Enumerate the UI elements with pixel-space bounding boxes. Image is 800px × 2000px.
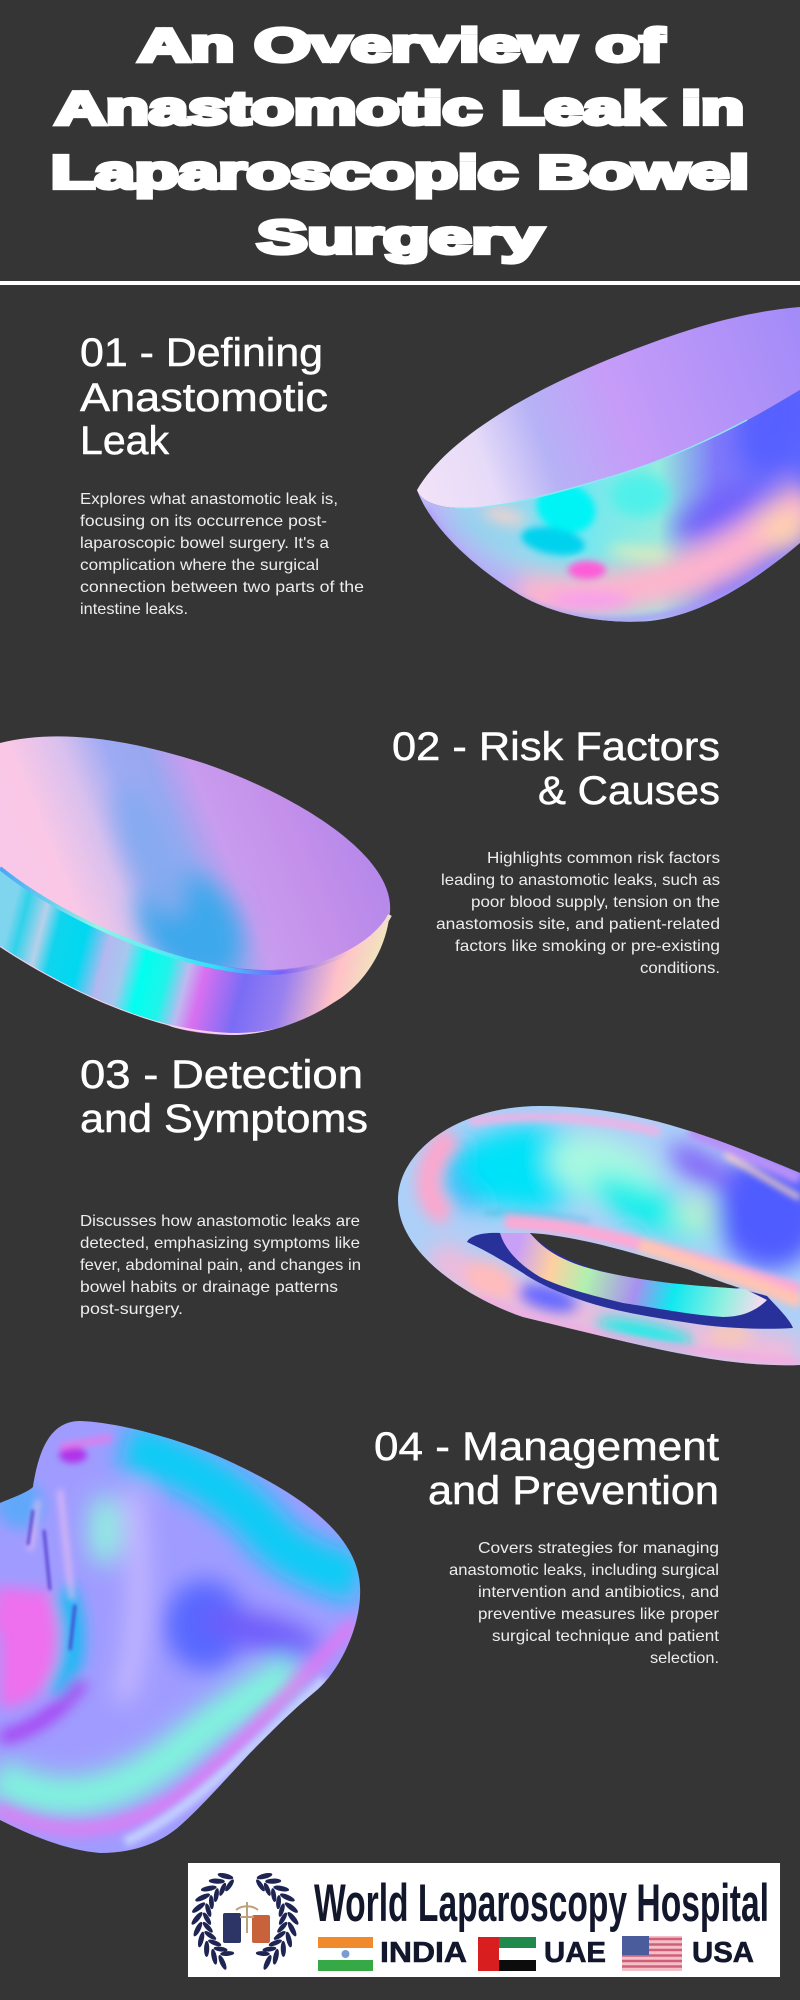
text block: 01: Explores what anastomotic leak is, [80, 491, 338, 508]
text block: 01: connection between two parts of the [80, 579, 364, 596]
title: Anastomotic Leak in [55, 82, 744, 134]
text block: 04: selection. [650, 1650, 719, 1667]
icon: iridescent bowl [410, 307, 800, 630]
heading: 01: Leak [80, 419, 170, 463]
torus inner shadow [467, 1233, 793, 1329]
text block: 02: leading to anastomotic leaks, such as [441, 872, 720, 889]
text block: 01: focusing on its occurrence post- [80, 513, 327, 530]
title [51, 19, 749, 263]
heading: 02: & Causes [538, 769, 720, 813]
text block: 02: poor blood supply, tension on the [471, 894, 720, 911]
heading: 04: and Prevention [428, 1469, 719, 1513]
heading: 01 [80, 331, 328, 463]
flag: USA [622, 1936, 682, 1971]
text block: 03: fever, abdominal pain, and changes in [80, 1257, 361, 1274]
text block: 04: anastomotic leaks, including surgical [449, 1562, 719, 1579]
heading: 03: 03 - Detection [80, 1053, 363, 1097]
label: UAE: UAE [544, 1937, 606, 1969]
torus inner wall [500, 1233, 767, 1317]
panel: 01 defining anastomotic leak [80, 307, 800, 630]
logo: World Laparoscopy Hospital [188, 1863, 780, 1977]
text block: 02 [436, 850, 720, 977]
text block: 04: preventive measures like proper [478, 1606, 720, 1623]
heading: 01: Anastomotic [80, 376, 328, 420]
text block: 02: anastomosis site, and patient-related [436, 916, 720, 933]
panel: 02 risk factors and causes [0, 725, 720, 1045]
heading: 03 [80, 1053, 368, 1141]
icon: iridescent torus [390, 1100, 800, 1370]
label: USA: USA [692, 1937, 754, 1969]
title: Surgery [257, 211, 544, 263]
panel: 03 detection and symptoms [80, 1053, 800, 1370]
flag: India [318, 1937, 373, 1971]
heading: 01: 01 - Defining [80, 331, 323, 375]
text block: 03: bowel habits or drainage patterns [80, 1279, 338, 1296]
heading: 04 [374, 1425, 719, 1513]
text block: 04: Covers strategies for managing [478, 1540, 719, 1557]
text block: 03: post-surgery. [80, 1301, 183, 1318]
text block: 02: factors like smoking or pre-existing [455, 938, 720, 955]
text block: 04: intervention and antibiotics, and [478, 1584, 719, 1601]
text block: 03: detected, emphasizing symptoms like [80, 1235, 360, 1252]
torus hole [530, 1233, 740, 1288]
title: Laparoscopic Bowel [51, 146, 749, 198]
text block: 04 [449, 1540, 720, 1667]
text block: 01 [80, 491, 364, 618]
text block: 02: Highlights common risk factors [487, 850, 720, 867]
icon: iridescent disc [0, 736, 395, 1045]
text block: 03 [80, 1213, 361, 1318]
icon: iridescent blob [0, 1410, 370, 1860]
icon: laurel wreath emblem [190, 1867, 300, 1972]
text block: 01: complication where the surgical [80, 557, 319, 574]
text block: 01: intestine leaks. [80, 601, 188, 618]
text block: 04: surgical technique and patient [492, 1628, 720, 1645]
label: INDIA: INDIA [380, 1937, 467, 1969]
text block: 01: laparoscopic bowel surgery. It's a [80, 535, 329, 552]
text block: 03: Discusses how anastomotic leaks are [80, 1213, 360, 1230]
heading: 02: 02 - Risk Factors [392, 725, 720, 769]
heading: 04: 04 - Management [374, 1425, 719, 1469]
flag: UAE [478, 1937, 536, 1971]
text block: 02: conditions. [640, 960, 720, 977]
panel: 04 management and prevention [0, 1410, 720, 1860]
heading: 03: and Symptoms [80, 1097, 368, 1141]
title: An Overview of [138, 19, 665, 71]
heading: 02 [392, 725, 720, 813]
